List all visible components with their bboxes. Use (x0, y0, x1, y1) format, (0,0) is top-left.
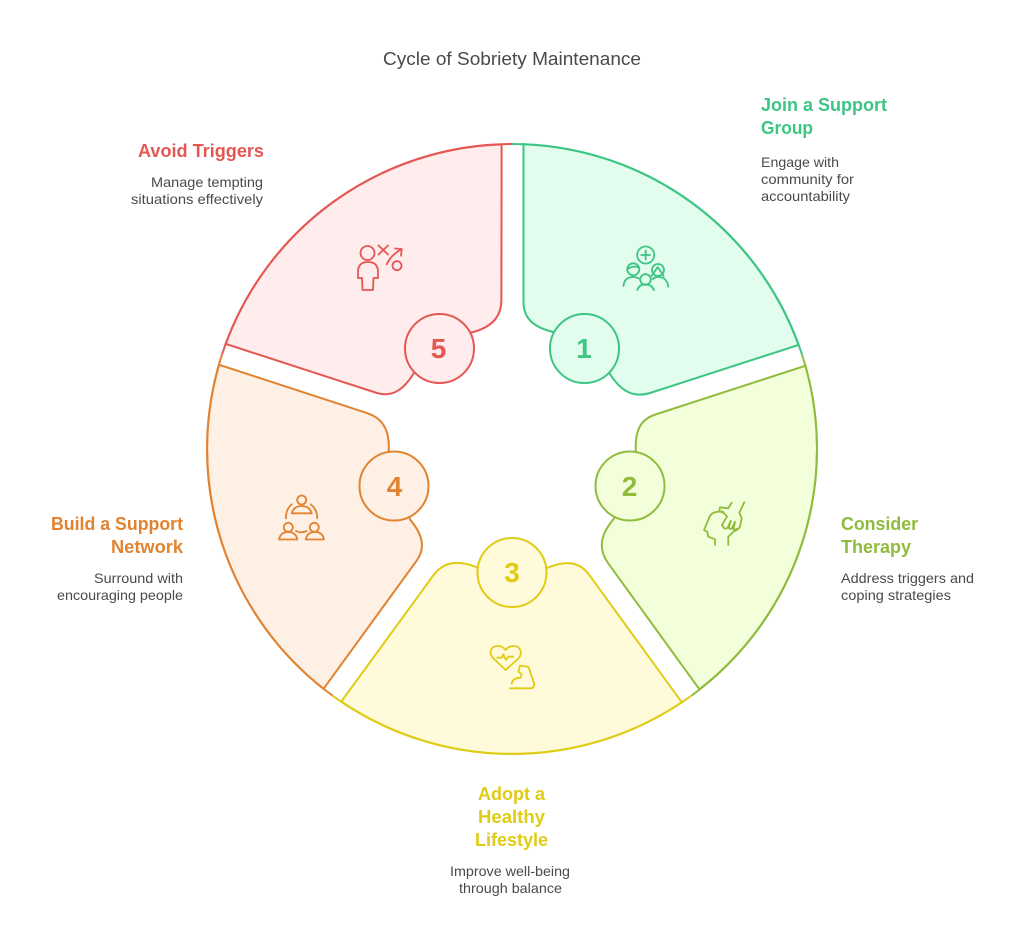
label: join a support group: Join a Support (761, 95, 887, 115)
label: build a support network: Build a Support (51, 514, 183, 534)
label: build a support network: encouraging people (57, 587, 183, 603)
label: join a support group (761, 95, 887, 204)
badge 5 (405, 314, 474, 383)
label: consider therapy: Address triggers and (841, 570, 974, 586)
label: join a support group: Group (761, 118, 813, 138)
label: adopt a healthy lifestyle: Lifestyle (475, 830, 548, 850)
label: adopt a healthy lifestyle (450, 784, 570, 896)
label: consider therapy: coping strategies (841, 587, 951, 603)
label: join a support group: community for (761, 171, 854, 187)
badge 1 (550, 314, 619, 383)
segment 4: build a support network (98, 322, 480, 696)
label: join a support group: accountability (761, 188, 850, 204)
segment 5: avoid triggers (222, 79, 550, 432)
badge 3: 3 (504, 557, 520, 588)
segment 2: consider therapy (564, 355, 892, 708)
label: avoid triggers: Avoid Triggers (138, 141, 264, 161)
label: avoid triggers: Manage tempting (151, 174, 263, 190)
title: Cycle of Sobriety Maintenance (383, 49, 641, 69)
badge 2: 2 (622, 471, 637, 502)
badge 2 (596, 452, 664, 520)
label: adopt a healthy lifestyle: Adopt a (478, 784, 546, 804)
badge 4 (360, 452, 428, 520)
badge 1: 1 (576, 333, 592, 364)
label: consider therapy (841, 514, 974, 603)
label: avoid triggers (131, 141, 264, 207)
label: consider therapy: Therapy (841, 537, 911, 557)
label: adopt a healthy lifestyle: Healthy (478, 807, 545, 827)
label: consider therapy: Consider (841, 514, 918, 534)
label: adopt a healthy lifestyle: through balance (459, 880, 562, 896)
segment 1: join a support group (512, 144, 802, 395)
icon: heart and muscle (491, 646, 534, 688)
badge 5: 5 (431, 333, 446, 364)
icon: support group (624, 246, 668, 290)
icon: support network (279, 496, 324, 540)
label: build a support network: Network (111, 537, 184, 557)
label: build a support network (51, 514, 184, 603)
label: adopt a healthy lifestyle: Improve well-being (450, 863, 570, 879)
icon: tactics (358, 246, 402, 290)
label: join a support group: Engage with (761, 154, 839, 170)
label: avoid triggers: situations effectively (131, 191, 263, 207)
icon: therapy (704, 502, 744, 545)
label: build a support network: Surround with (94, 570, 183, 586)
badge 4: 4 (387, 471, 403, 502)
badge 3 (478, 538, 546, 607)
segment 3: adopt a healthy lifestyle (309, 493, 691, 866)
